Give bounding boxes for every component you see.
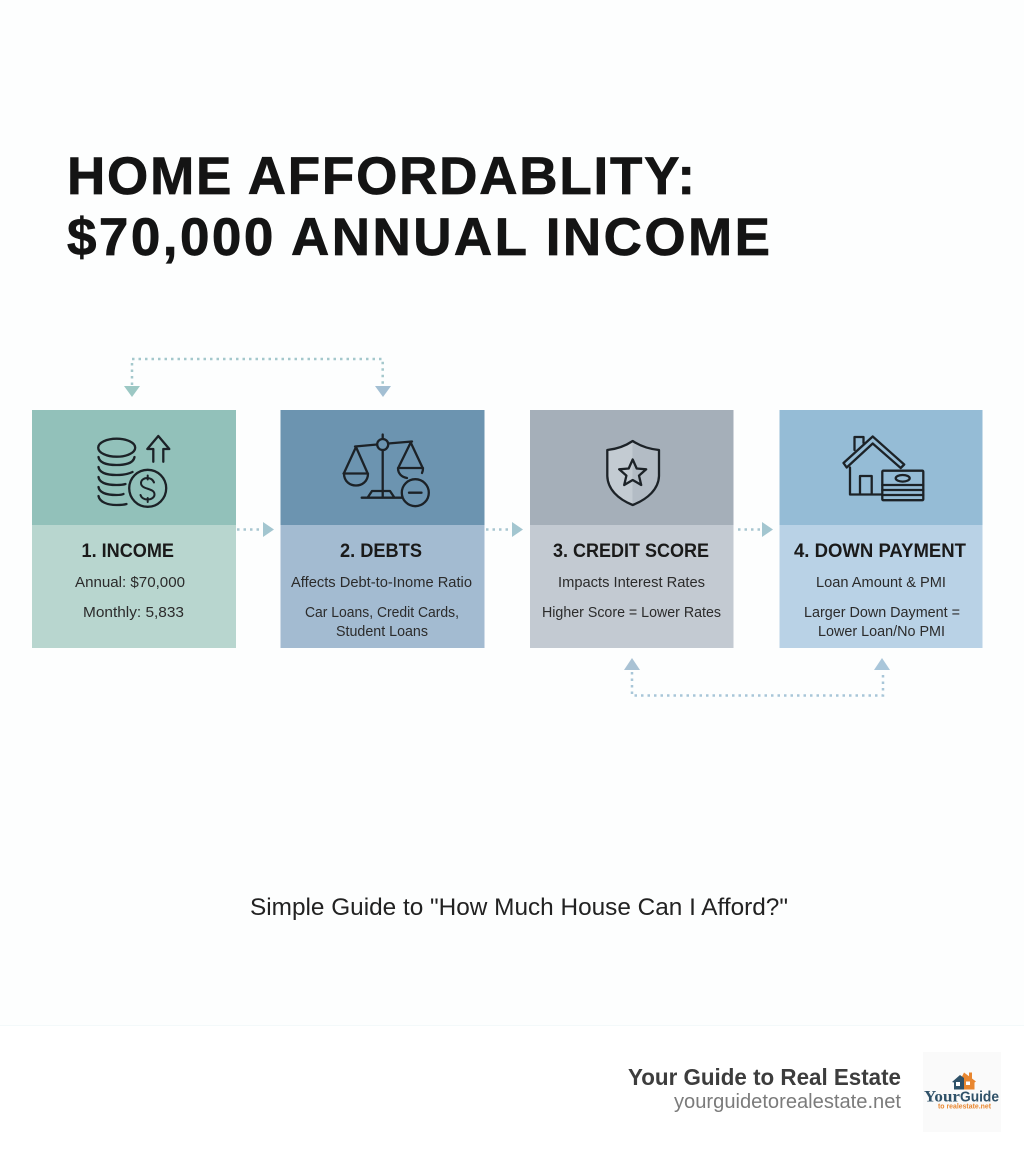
logo: Guide — [960, 1090, 999, 1106]
text: loan amount: Loan Amount & PMI — [816, 574, 946, 591]
title: $70,000 ANNUAL INCOME — [67, 208, 770, 267]
text: monthly income: Monthly: 5,833 — [83, 604, 184, 621]
text: larger down payment: Lower Loan/No PMI — [818, 623, 945, 640]
icon: balance scale with minus — [344, 434, 429, 506]
arrow: loop connecting credit score and down payment — [624, 658, 890, 696]
heading: down payment: 4. DOWN PAYMENT — [794, 540, 966, 562]
text: debt types: Student Loans — [336, 623, 428, 640]
panel: debts — [280, 410, 484, 648]
arrow: credit score to down payment — [738, 522, 773, 537]
logo — [923, 1052, 1001, 1132]
text: interest rates: Impacts Interest Rates — [558, 574, 705, 591]
text: larger down payment — [804, 604, 960, 640]
text: debt ratio: Affects Debt-to-Inome Ratio — [291, 574, 472, 591]
panel: down payment — [780, 410, 982, 648]
logo: to realestate.net — [938, 1102, 991, 1110]
text: larger down payment: Larger Down Dayment = — [804, 604, 960, 621]
text: annual income: Annual: $70,000 — [75, 574, 185, 591]
heading: debts: 2. DEBTS — [340, 540, 422, 562]
title — [67, 147, 770, 267]
heading: credit score: 3. CREDIT SCORE — [553, 540, 709, 562]
text: higher score: Higher Score = Lower Rates — [542, 604, 721, 621]
text: debt types: Car Loans, Credit Cards, — [305, 604, 459, 621]
footer brand text: Your Guide to Real Estate — [628, 1064, 901, 1090]
arrow: debts to credit score — [486, 522, 523, 537]
subtitle: Simple Guide to "How Much House Can I Afford?" — [250, 894, 788, 921]
icon: shield with star — [607, 441, 659, 505]
logo: Your — [924, 1089, 960, 1106]
text: debt types — [305, 604, 459, 640]
panel: income — [32, 410, 236, 648]
footer brand text — [628, 1064, 901, 1113]
icon: logo house — [952, 1072, 976, 1090]
footer brand text: yourguidetorealestate.net — [674, 1091, 901, 1113]
icon: house with cash — [844, 436, 923, 500]
title: HOME AFFORDABLITY: — [67, 147, 695, 206]
arrow: income to debts — [237, 522, 274, 537]
heading: income: 1. INCOME — [82, 540, 174, 562]
panel: credit score — [530, 410, 734, 648]
icon: coins with dollar and up arrow — [98, 436, 169, 507]
arrow: loop connecting income and debts — [124, 359, 391, 397]
